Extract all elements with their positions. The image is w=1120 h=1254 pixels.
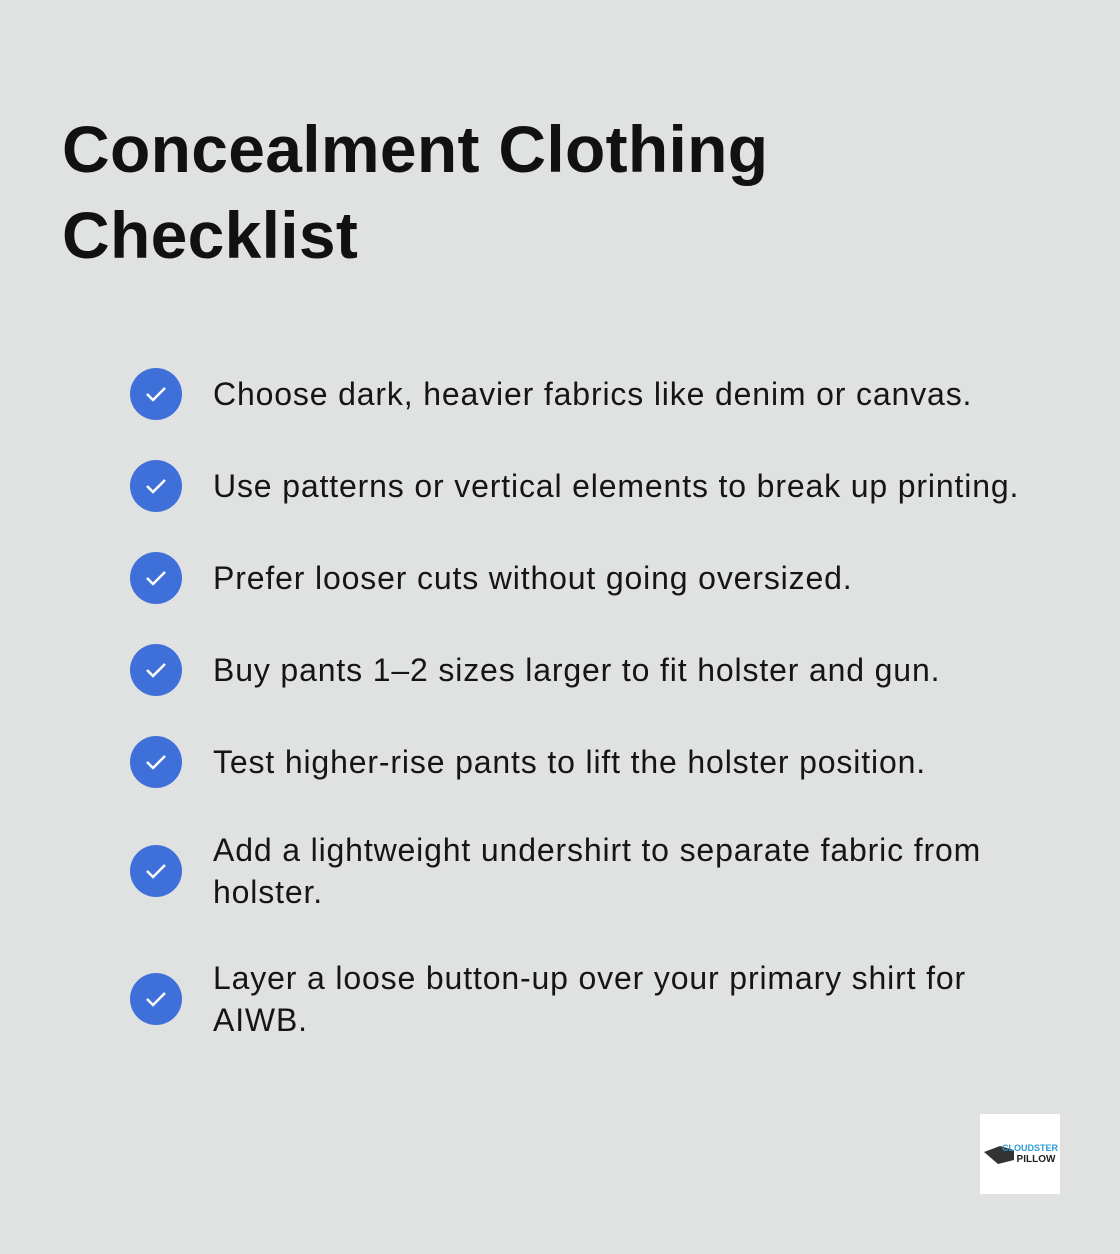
item 7: AIWB. [213, 1002, 308, 1038]
item 1: Choose dark, heavier fabrics like denim or canvas. [213, 376, 972, 412]
title: Checklist [62, 198, 358, 272]
logo: CLOUDSTER [1002, 1143, 1058, 1153]
item 6: holster. [213, 874, 323, 910]
item 3 [130, 552, 853, 604]
item 6: Add a lightweight undershirt to separate fabric from [213, 832, 981, 868]
item 1 [130, 368, 972, 420]
item 5: Test higher-rise pants to lift the holster position. [213, 744, 926, 780]
logo: PILLOW [1017, 1154, 1056, 1165]
item 5 [130, 736, 926, 788]
item 3: Prefer looser cuts without going oversized. [213, 560, 853, 596]
title [62, 112, 768, 272]
item 7: Layer a loose button-up over your primary shirt for [213, 960, 966, 996]
item 4: Buy pants 1–2 sizes larger to fit holster and gun. [213, 652, 940, 688]
item 4 [130, 644, 940, 696]
item 6 [130, 832, 981, 910]
logo [980, 1114, 1060, 1194]
item 2: Use patterns or vertical elements to break up printing. [213, 468, 1019, 504]
item 7 [130, 960, 966, 1038]
title: Concealment Clothing [62, 112, 768, 186]
item 2 [130, 460, 1019, 512]
